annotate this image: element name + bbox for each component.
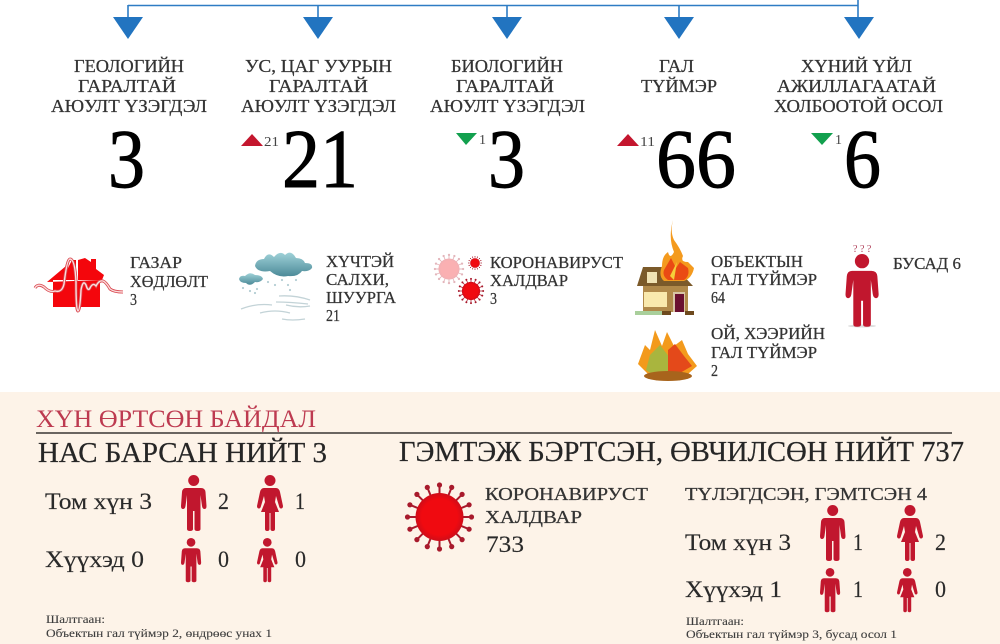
injured: children row <box>685 568 946 612</box>
label: coronavirus cases: КОРОНАВИРУСТ <box>485 484 648 504</box>
label: storm <box>326 252 396 325</box>
label: coronavirus infection <box>490 253 623 308</box>
connector tree with blue arrows <box>113 0 874 39</box>
icon: burning house <box>635 220 694 315</box>
heading: human activity: ХОЛБООТОЙ ОСОЛ <box>774 96 943 116</box>
number: weather with red increase marker: 21 <box>282 113 358 206</box>
number: fire with red increase marker: 66 <box>656 113 736 206</box>
label: building fire: ОБЪЕКТЫН <box>711 252 803 271</box>
heading: fire <box>641 56 717 96</box>
injured: causes note: Шалтгаан: <box>686 616 744 628</box>
label: earthquake <box>130 253 208 309</box>
heading: burns and injuries: ТҮЛЭГДСЭН, ГЭМТСЭН 4 <box>685 484 927 504</box>
heading: water and weather: АЮУЛТ ҮЗЭГДЭЛ <box>241 96 396 116</box>
injured: adults row: 1 <box>853 530 863 555</box>
label: other: БУСАД 6 <box>893 254 961 273</box>
label: forest and steppe fire: ОЙ, ХЭЭРИЙН <box>711 324 825 343</box>
heading: human activity: ХҮНИЙ ҮЙЛ <box>801 56 912 76</box>
heading: geological <box>51 56 207 116</box>
heading: total injured and sick: ГЭМТЭЖ БЭРТСЭН, ӨВЧИЛСӨН НИЙТ 737 <box>399 436 964 468</box>
heading: human activity <box>774 56 943 116</box>
injured: adults row: Том хүн 3 <box>685 530 791 555</box>
heading: geological: АЮУЛТ ҮЗЭГДЭЛ <box>51 96 207 116</box>
number: geological: 3 <box>108 113 145 206</box>
icon: earthquake house <box>35 258 123 311</box>
label: earthquake: ГАЗАР <box>130 253 182 272</box>
deaths: causes note <box>46 614 272 640</box>
injured: children row: Хүүхэд 1 <box>685 577 782 602</box>
label: coronavirus infection: КОРОНАВИРУСТ <box>490 253 623 272</box>
deaths: adults row: Том хүн 3 <box>45 489 152 514</box>
number: human activity with green decrease marker: 6 <box>844 113 881 206</box>
icon: storm clouds <box>239 253 312 320</box>
injured: children row: 1 <box>853 577 863 602</box>
label: building fire: 64 <box>711 288 725 307</box>
deaths: children row: 0 <box>218 547 229 572</box>
deaths: children row: 0 <box>295 547 306 572</box>
label: coronavirus cases: 733 <box>486 532 524 557</box>
icon: large coronavirus <box>405 482 474 552</box>
deaths: adults row: 1 <box>295 489 305 514</box>
label: forest and steppe fire <box>711 324 825 380</box>
label: coronavirus cases <box>485 484 648 557</box>
section rule <box>36 432 952 434</box>
label: storm: ХҮЧТЭЙ <box>326 252 394 271</box>
injured: causes note: Объектын гал түймэр 3, бусад осол 1 <box>686 629 897 641</box>
deaths: children row: Хүүхэд 0 <box>45 547 144 572</box>
deaths: adults row <box>45 475 305 531</box>
heading: fire: ГАЛ <box>659 56 694 76</box>
number: fire with red increase marker <box>617 113 736 206</box>
heading: geological: ГЕОЛОГИЙН <box>74 56 184 76</box>
deaths: causes note: Объектын гал түймэр 2, өндрөөс унах 1 <box>46 628 272 640</box>
heading: water and weather <box>241 56 396 116</box>
number: human activity with green decrease marker <box>811 113 881 206</box>
heading: geological: ГАРАЛТАЙ <box>78 76 176 96</box>
number: biological with green decrease marker <box>456 113 525 206</box>
heading: fire: ТҮЙМЭР <box>641 76 717 96</box>
label: earthquake: 3 <box>130 290 137 309</box>
injured: causes note <box>686 616 897 641</box>
deaths: children row <box>45 538 306 582</box>
icon: confused person: ? ? ? <box>853 244 872 255</box>
injured: adults row <box>685 505 946 561</box>
icon: forest fire bush <box>638 330 697 381</box>
heading: water and weather: УС, ЦАГ УУРЫН <box>245 56 392 76</box>
injured: children row: 0 <box>935 577 946 602</box>
label: coronavirus cases: ХАЛДВАР <box>485 507 582 527</box>
deaths: adults row: 2 <box>218 489 229 514</box>
label: earthquake: ХӨДЛӨЛТ <box>130 272 208 291</box>
label: storm: ШУУРГА <box>326 288 396 307</box>
number: biological with green decrease marker: 3 <box>488 113 525 206</box>
number: weather with red increase marker <box>241 113 358 206</box>
heading: total deaths: НАС БАРСАН НИЙТ 3 <box>38 437 327 469</box>
number: fire with red increase marker: 11 <box>640 134 655 149</box>
label: building fire <box>711 252 817 307</box>
number: biological with green decrease marker: 1 <box>479 132 486 147</box>
deaths: causes note: Шалтгаан: <box>46 614 105 626</box>
label: storm: 21 <box>326 306 340 325</box>
label: storm: САЛХИ, <box>326 270 389 289</box>
icon: coronavirus cluster <box>434 254 484 304</box>
icon: confused person <box>846 244 879 328</box>
heading: biological <box>430 56 585 116</box>
label: building fire: ГАЛ ТҮЙМЭР <box>711 270 817 289</box>
heading: biological: ГАРАЛТАЙ <box>456 76 554 96</box>
heading: biological: БИОЛОГИЙН <box>451 56 563 76</box>
heading: water and weather: ГАРАЛТАЙ <box>269 76 368 96</box>
number: weather with red increase marker: 21 <box>264 134 279 149</box>
label: forest and steppe fire: ГАЛ ТҮЙМЭР <box>711 343 817 362</box>
label: forest and steppe fire: 2 <box>711 361 718 380</box>
label: coronavirus infection: 3 <box>490 289 497 308</box>
heading: human activity: АЖИЛЛАГААТАЙ <box>777 76 936 96</box>
panel background: human impact <box>0 392 1000 644</box>
heading: biological: АЮУЛТ ҮЗЭГДЭЛ <box>430 96 585 116</box>
injured: adults row: 2 <box>935 530 946 555</box>
label: coronavirus infection: ХАЛДВАР <box>490 271 568 290</box>
section title: ХҮН ӨРТСӨН БАЙДАЛ <box>36 405 316 433</box>
number: human activity with green decrease marker: 1 <box>835 132 842 147</box>
